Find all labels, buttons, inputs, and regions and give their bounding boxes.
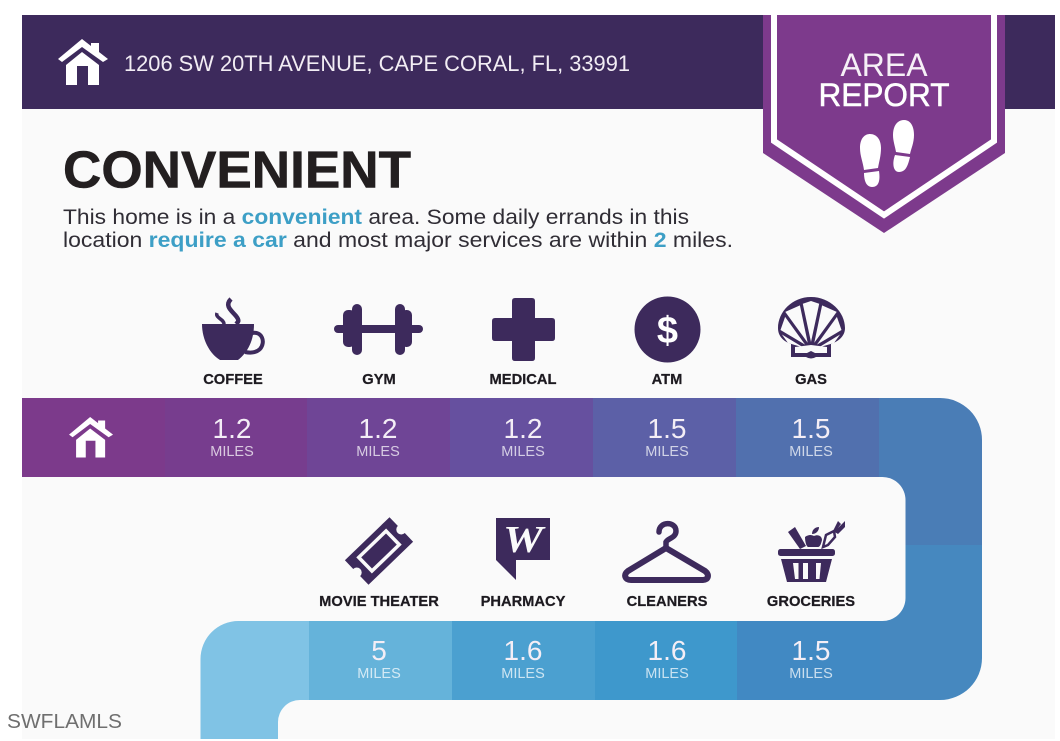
distance values: row 2: MILES: [789, 666, 833, 682]
badge title: AREA: [840, 47, 928, 83]
stop: cleaners: CLEANERS: [627, 594, 708, 610]
distance values: row 2: MILES: [501, 666, 545, 682]
distance values: row 1: MILES: [210, 444, 254, 460]
distance values: row 1: 1.2: [504, 413, 542, 444]
address: 1206 SW 20TH AVENUE, CAPE CORAL, FL, 33991: [124, 51, 630, 76]
stop: coffee: COFFEE: [203, 372, 263, 388]
description text: This home is in a convenient area. Some daily errands in this: [63, 206, 689, 229]
distance values: row 2: MILES: [357, 666, 401, 682]
distance values: row 1: MILES: [501, 444, 545, 460]
distance values: row 1: 1.5: [792, 413, 830, 444]
distance values: row 1: MILES: [645, 444, 689, 460]
description text: [63, 206, 733, 252]
icon: header house: [58, 39, 108, 85]
stop: atm: [634, 296, 700, 388]
icon: footprints: [860, 120, 914, 187]
stop: coffee: [202, 299, 263, 388]
stop: groceries: GROCERIES: [767, 594, 855, 610]
distance values: row 2: 1.6: [504, 635, 542, 666]
stop: pharmacy: [481, 518, 566, 610]
stop: movie theater: MOVIE THEATER: [319, 594, 439, 610]
stop: groceries: [767, 521, 855, 610]
stop: gym: GYM: [362, 372, 396, 388]
stop: medical: MEDICAL: [490, 372, 556, 388]
distance values: row 2: [357, 635, 833, 682]
distance values: row 1: MILES: [356, 444, 400, 460]
stop: pharmacy: W: [503, 519, 547, 561]
distance values: row 1: 1.2: [213, 413, 251, 444]
stop: atm: ATM: [652, 372, 682, 388]
distance values: row 2: MILES: [645, 666, 689, 682]
stop: atm: $: [657, 310, 678, 352]
heading: CONVENIENT: [63, 142, 411, 200]
stop: pharmacy: PHARMACY: [481, 594, 566, 610]
route path: [22, 398, 982, 739]
distance values: row 2: 1.5: [792, 635, 830, 666]
distance values: row 1: 1.5: [648, 413, 686, 444]
stop: medical: [490, 298, 556, 388]
watermark: SWFLAMLS: [7, 711, 122, 733]
distance values: row 1: MILES: [789, 444, 833, 460]
header bar: [22, 15, 1055, 109]
distance values: row 2: 5: [371, 635, 387, 666]
badge: area report: [763, 15, 1005, 233]
badge: area report: REPORT: [818, 77, 950, 113]
distance values: row 1: 1.2: [359, 413, 397, 444]
distance values: row 2: 1.6: [648, 635, 686, 666]
distance values: row 1: [210, 413, 833, 460]
icon: route house: [69, 417, 113, 458]
stop: movie theater: [319, 517, 439, 610]
stop: gas: [778, 297, 845, 388]
stop: gas: GAS: [795, 372, 827, 388]
stop: cleaners: [625, 524, 708, 610]
stop: gym: [334, 304, 423, 388]
description text: location require a car and most major services are within 2 miles.: [63, 229, 733, 252]
